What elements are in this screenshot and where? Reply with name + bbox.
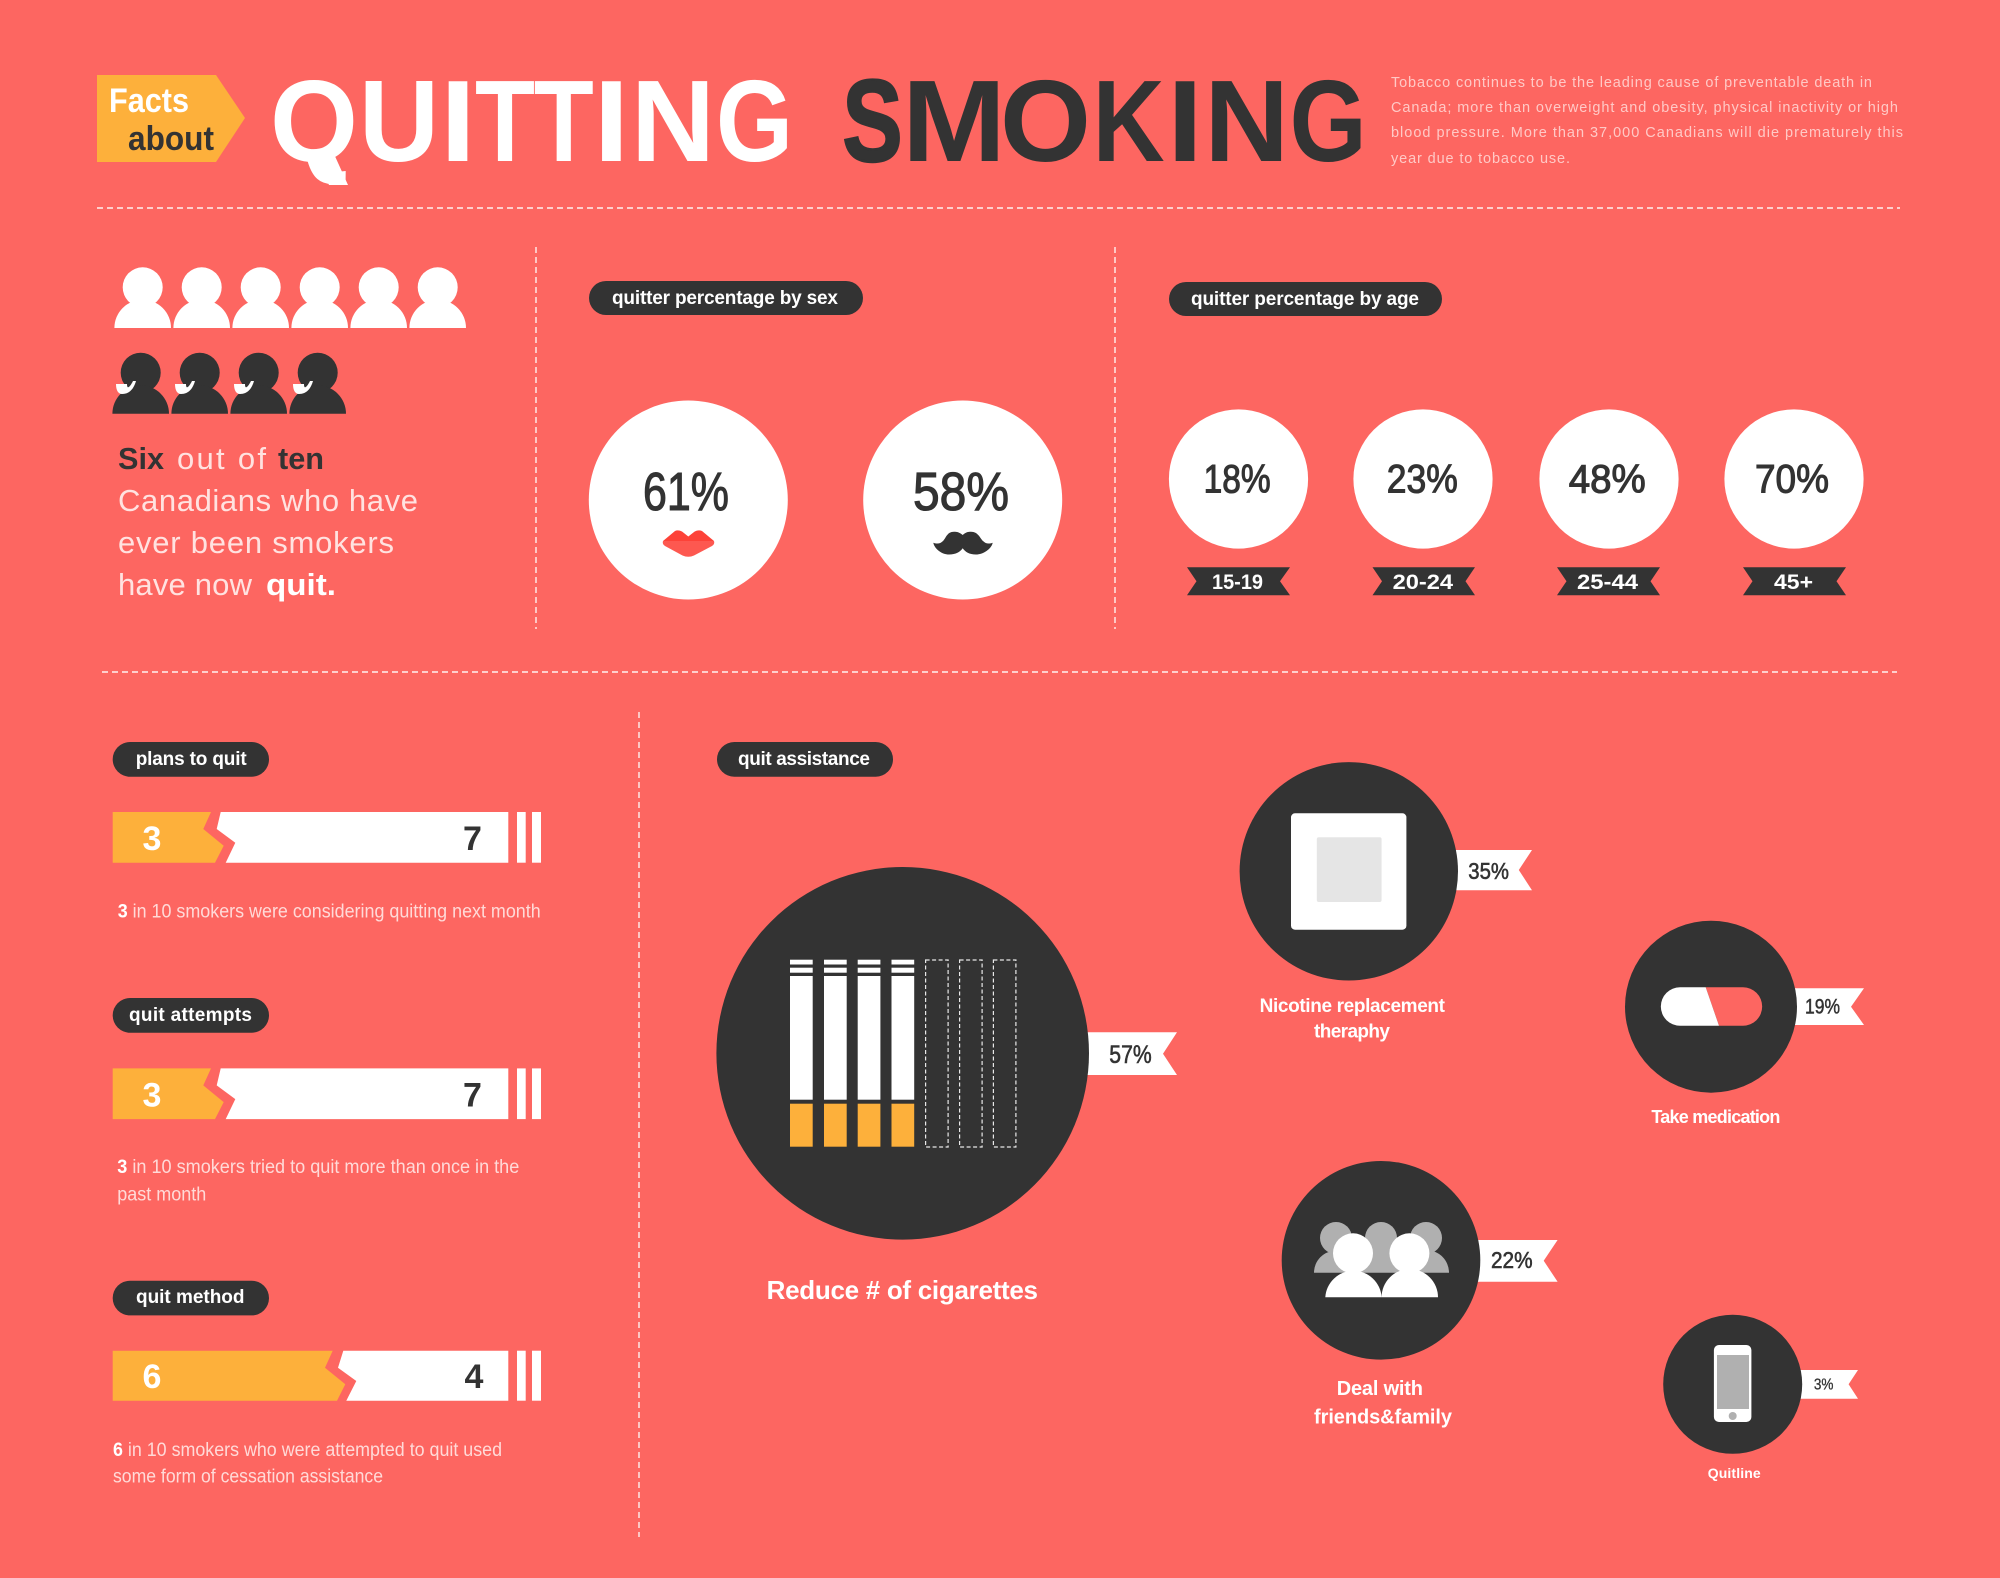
item: reduce cigarettes 57% [716,867,1177,1305]
pill heading [717,742,893,777]
age 15-19 [1169,409,1308,595]
pill heading [113,1281,269,1315]
pill heading [113,742,269,777]
bar: 3 of 10: 7 [463,820,482,858]
title: K [1093,56,1165,186]
item: nicotine replacement 35%: Nicotine replacement [1260,996,1446,1017]
circle: women 61% [589,400,788,600]
description: past month [117,1184,206,1206]
pill heading: quit attempts [129,1005,252,1026]
title: N [631,56,715,186]
item: reduce cigarettes 57%: 57% [1109,1041,1152,1069]
pill heading [589,281,863,315]
age 15-19: 18% [1204,458,1271,502]
age 20-24: 23% [1387,458,1458,502]
item: nicotine replacement 35%: theraphy [1314,1021,1390,1042]
title: I [593,56,629,186]
age 45+ [1724,409,1864,595]
statement text: have now [118,567,253,602]
item: quitline 3% [1663,1315,1858,1481]
item: friends and family 22% [1282,1161,1558,1428]
age 45+: 45+ [1774,571,1813,594]
bar: 6 of 10: 4 [464,1358,484,1396]
icons: dark people with pipes, smokers [112,353,346,414]
intro text: Canada; more than overweight and obesity, physical inactivity or high [1391,100,1898,116]
circle: men 58% [863,400,1062,600]
circle: women 61%: 61% [643,462,729,522]
item: quitline 3%: Quitline [1708,1465,1761,1481]
age 20-24: 20-24 [1393,571,1453,594]
pill heading: plans to quit [136,749,247,770]
badge: facts about [97,75,245,162]
pill heading: quitter percentage by sex [612,288,838,309]
pill heading: quitter percentage by age [1191,289,1419,310]
panel: quit method [113,1281,541,1488]
statement text: ten [278,441,324,476]
age 45+: 70% [1755,458,1829,502]
statement text: ever been smokers [118,525,394,560]
pill heading [113,998,269,1033]
title: G [716,56,793,186]
bar: 3 of 10: 3 [142,1076,161,1114]
age 25-44 [1539,409,1679,595]
panel: quit attempts [113,998,541,1206]
title: G [1290,56,1367,186]
item: take medication 19%: 19% [1805,995,1840,1018]
bar: 3 of 10: 7 [463,1076,482,1114]
intro text: Tobacco continues to be the leading cause of preventable death in [1391,75,1872,91]
icon: cigarettes [790,960,1016,1147]
title: I [440,56,476,186]
pill heading [1169,282,1442,316]
item: reduce cigarettes 57%: Reduce # of cigarettes [767,1275,1038,1305]
icons: white people, quitters [114,267,466,328]
description: 3 in 10 smokers tried to quit more than once in the [117,1157,519,1178]
age 20-24 [1353,409,1493,595]
bar: 6 of 10 [113,1351,541,1401]
description: some form of cessation assistance [113,1467,383,1488]
title [270,56,1367,186]
title: O [1000,56,1091,186]
pill heading: quit method [136,1287,244,1308]
item: friends and family 22%: friends&family [1314,1406,1453,1428]
item: take medication 19% [1625,921,1864,1127]
description: 3 in 10 smokers were considering quitting next month [118,902,541,922]
bar: 3 of 10: 3 [142,820,161,858]
intro text: blood pressure. More than 37,000 Canadians will die prematurely this [1391,125,1903,141]
badge: facts about: Facts [109,82,189,120]
statement text: Six [118,441,165,476]
description: 6 in 10 smokers who were attempted to quit used [113,1440,502,1461]
intro text [1391,75,1903,167]
item: friends and family 22%: Deal with [1337,1378,1423,1400]
age 15-19: 15-19 [1212,571,1263,594]
title: T [475,56,535,186]
icon: group of people [1314,1222,1449,1297]
title: I [1167,56,1203,186]
title: M [902,56,1006,186]
panel: six out of ten [112,267,466,602]
description [113,1440,502,1488]
panel: quitter percentage by age [1169,282,1864,595]
description [117,1157,519,1206]
panel: quitter percentage by sex [589,281,1062,600]
bar: 6 of 10: 6 [142,1358,161,1396]
badge: facts about: about [128,120,214,158]
title: S [842,56,902,186]
title: T [534,56,594,186]
panel: plans to quit [113,742,541,922]
intro text: year due to tobacco use. [1391,151,1570,167]
age 25-44: 48% [1569,458,1646,502]
statement text: quit. [266,567,336,602]
statement text: out of [177,441,266,476]
circle: men 58%: 58% [913,462,1009,522]
panel: quit assistance [716,742,1864,1481]
item: nicotine replacement 35% [1240,762,1532,1042]
item: quitline 3%: 3% [1814,1376,1834,1393]
item: friends and family 22%: 22% [1491,1247,1533,1273]
header [97,56,1903,186]
bar: 3 of 10 [113,812,541,863]
bar: 3 of 10 [113,1068,541,1119]
item: nicotine replacement 35%: 35% [1468,858,1509,884]
pill heading: quit assistance [738,749,870,770]
title: Q [270,56,358,186]
age 25-44: 25-44 [1577,571,1638,594]
title: U [359,56,439,186]
statement text: Canadians who have [118,483,418,518]
item: take medication 19%: Take medication [1651,1107,1780,1127]
title: N [1204,56,1289,186]
statement text [118,441,418,602]
